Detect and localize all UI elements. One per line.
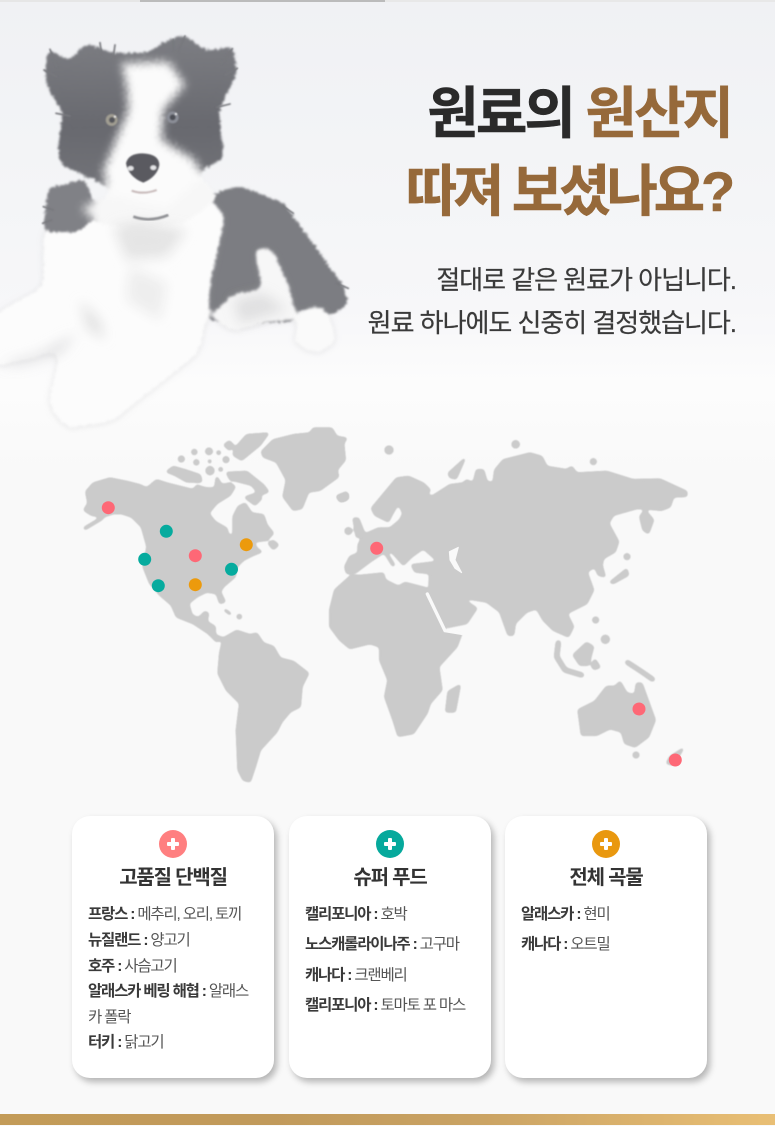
title second line: 따져 보셨나요?: [406, 160, 731, 223]
list item: Alaska brown rice: 알래스카 : 현미: [521, 906, 610, 923]
panel: whole grains: [505, 816, 707, 1078]
list item: Turkey: 터키 : 닭고기: [88, 1034, 164, 1051]
map: inland seas: [427, 547, 462, 633]
list item: North Carolina: 노스캐롤라이나주 : 고구마: [305, 936, 459, 953]
map: Americas: [84, 428, 349, 782]
panel: high quality protein: [72, 816, 274, 1078]
heading: 전체 곡물: [569, 867, 643, 889]
icon: pink plus: [159, 830, 187, 858]
map markers: teal: [138, 525, 238, 592]
list item: France: 프랑스 : 메추리, 오리, 토끼: [88, 906, 241, 923]
dog collar: [133, 215, 168, 219]
dog chest and front legs: [0, 190, 225, 428]
hero background: [0, 0, 775, 480]
dog rear body: [203, 187, 348, 322]
title: 원료의 원산지: [427, 82, 731, 145]
subtitle line 2: 원료 하나에도 신중히 결정했습니다.: [368, 308, 736, 338]
list item: California pumpkin: 캘리포니아 : 호박: [305, 906, 407, 923]
dog head dark: [45, 35, 237, 202]
panel: super food: [289, 816, 491, 1078]
dog chest shading: [113, 222, 187, 260]
dog inner leg: [210, 247, 297, 332]
heading: 고품질 단백질: [119, 867, 227, 889]
dog neck dark patch: [43, 180, 97, 232]
icon: teal plus: [376, 830, 404, 858]
dog rear paw: [293, 305, 337, 354]
bottom gold bar: [0, 1114, 775, 1125]
dog fur wisps: [43, 36, 348, 288]
list item: Canada oatmeal: 캐나다 : 오트밀: [521, 936, 610, 953]
dog blaze and muzzle: [103, 62, 205, 208]
map markers: pink: [102, 501, 682, 766]
list item: Australia: 호주 : 사슴고기: [88, 958, 177, 975]
heading: 슈퍼 푸드: [353, 867, 427, 889]
dog nose and mouth: [126, 153, 159, 193]
map: Eurasia, Africa, Oceania: [330, 440, 687, 765]
list item: Alaska continued: 카 폴락: [88, 1009, 130, 1026]
list item: Canada cranberry: 캐나다 : 크랜베리: [305, 967, 407, 984]
list item: California tomato: 캘리포니아 : 토마토 포 마스: [305, 997, 465, 1014]
top edge strip: [0, 0, 775, 2]
list item: Alaska Bering Sea: 알래스카 베링 해협 : 알래스: [88, 983, 248, 1000]
subtitle line 1: 절대로 같은 원료가 아닙니다.: [436, 265, 736, 295]
list item: New Zealand: 뉴질랜드 : 양고기: [88, 932, 190, 949]
map markers: orange: [189, 538, 253, 591]
icon: orange plus: [592, 830, 620, 858]
illustration: border collie puppy: [0, 34, 682, 763]
world map with origin markers: [83, 426, 688, 783]
dog eyes: [106, 111, 179, 126]
